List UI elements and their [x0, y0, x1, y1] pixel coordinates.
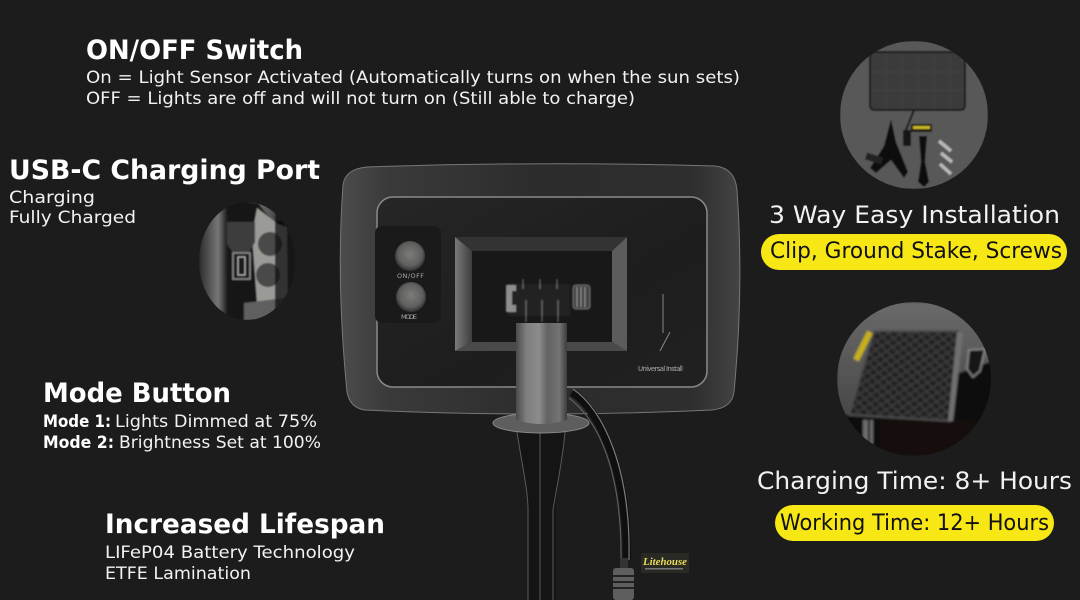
- text: mode descriptions: Brightness Set at 100%: [119, 433, 321, 453]
- text: ON/OFF description: On = Light Sensor Activated (Automatically turns on when the sun sets): [86, 68, 740, 88]
- icon: USB-C port close-up: [199, 202, 295, 321]
- text: mode descriptions: Mode 1:: [43, 412, 111, 432]
- connector: [613, 558, 634, 600]
- flange: [493, 413, 589, 433]
- cable: [569, 389, 629, 560]
- logo: Litehouse: Litehouse: [642, 556, 687, 568]
- text: mode descriptions: [43, 412, 321, 453]
- text: ON/OFF description: [86, 68, 740, 109]
- logo: Litehouse: [641, 553, 689, 573]
- button plate: MODE: [401, 313, 417, 321]
- arrow mark and install label: Universal Install: [638, 365, 683, 373]
- text: USB-C description: Charging: [9, 188, 95, 208]
- mount plate: [455, 237, 627, 351]
- bracket: [506, 279, 590, 322]
- pole: [516, 323, 567, 424]
- text: mode descriptions: Lights Dimmed at 75%: [115, 412, 317, 432]
- text: lifespan details: [105, 543, 355, 584]
- panel body: [340, 164, 740, 414]
- text: USB-C description: [9, 188, 136, 228]
- text: lifespan details: LIFeP04 Battery Technology: [105, 543, 355, 563]
- text: mode descriptions: Mode 2:: [43, 433, 114, 453]
- heading: 3 way easy installation: 3 Way Easy Installation: [769, 201, 1060, 229]
- recess: [377, 197, 707, 387]
- image: solar panel: [837, 302, 995, 456]
- stake: [517, 432, 565, 600]
- heading: USB-C charging port: USB-C Charging Port: [9, 155, 320, 186]
- illustration: solar light back view: [340, 164, 740, 600]
- pill: working time: Working Time: 12+ Hours: [780, 511, 1049, 536]
- pill: working time: [775, 505, 1054, 541]
- heading: charging time: Charging Time: 8+ Hours: [757, 467, 1072, 495]
- text: lifespan details: ETFE Lamination: [105, 564, 251, 584]
- heading: mode button: Mode Button: [43, 378, 231, 409]
- pill: mounting options: [761, 234, 1067, 270]
- text: USB-C description: Fully Charged: [9, 208, 136, 228]
- heading: ON/OFF switch: ON/OFF Switch: [86, 35, 303, 66]
- image: installation kit: [840, 41, 988, 189]
- text: ON/OFF description: OFF = Lights are off and will not turn on (Still able to charge): [86, 89, 635, 109]
- button plate: ON/OFF: [397, 272, 424, 280]
- button plate: [375, 226, 441, 323]
- arrow mark and install label: [638, 294, 683, 373]
- pill: mounting options: Clip, Ground Stake, Screws: [770, 239, 1062, 264]
- heading: increased lifespan: Increased Lifespan: [105, 509, 385, 540]
